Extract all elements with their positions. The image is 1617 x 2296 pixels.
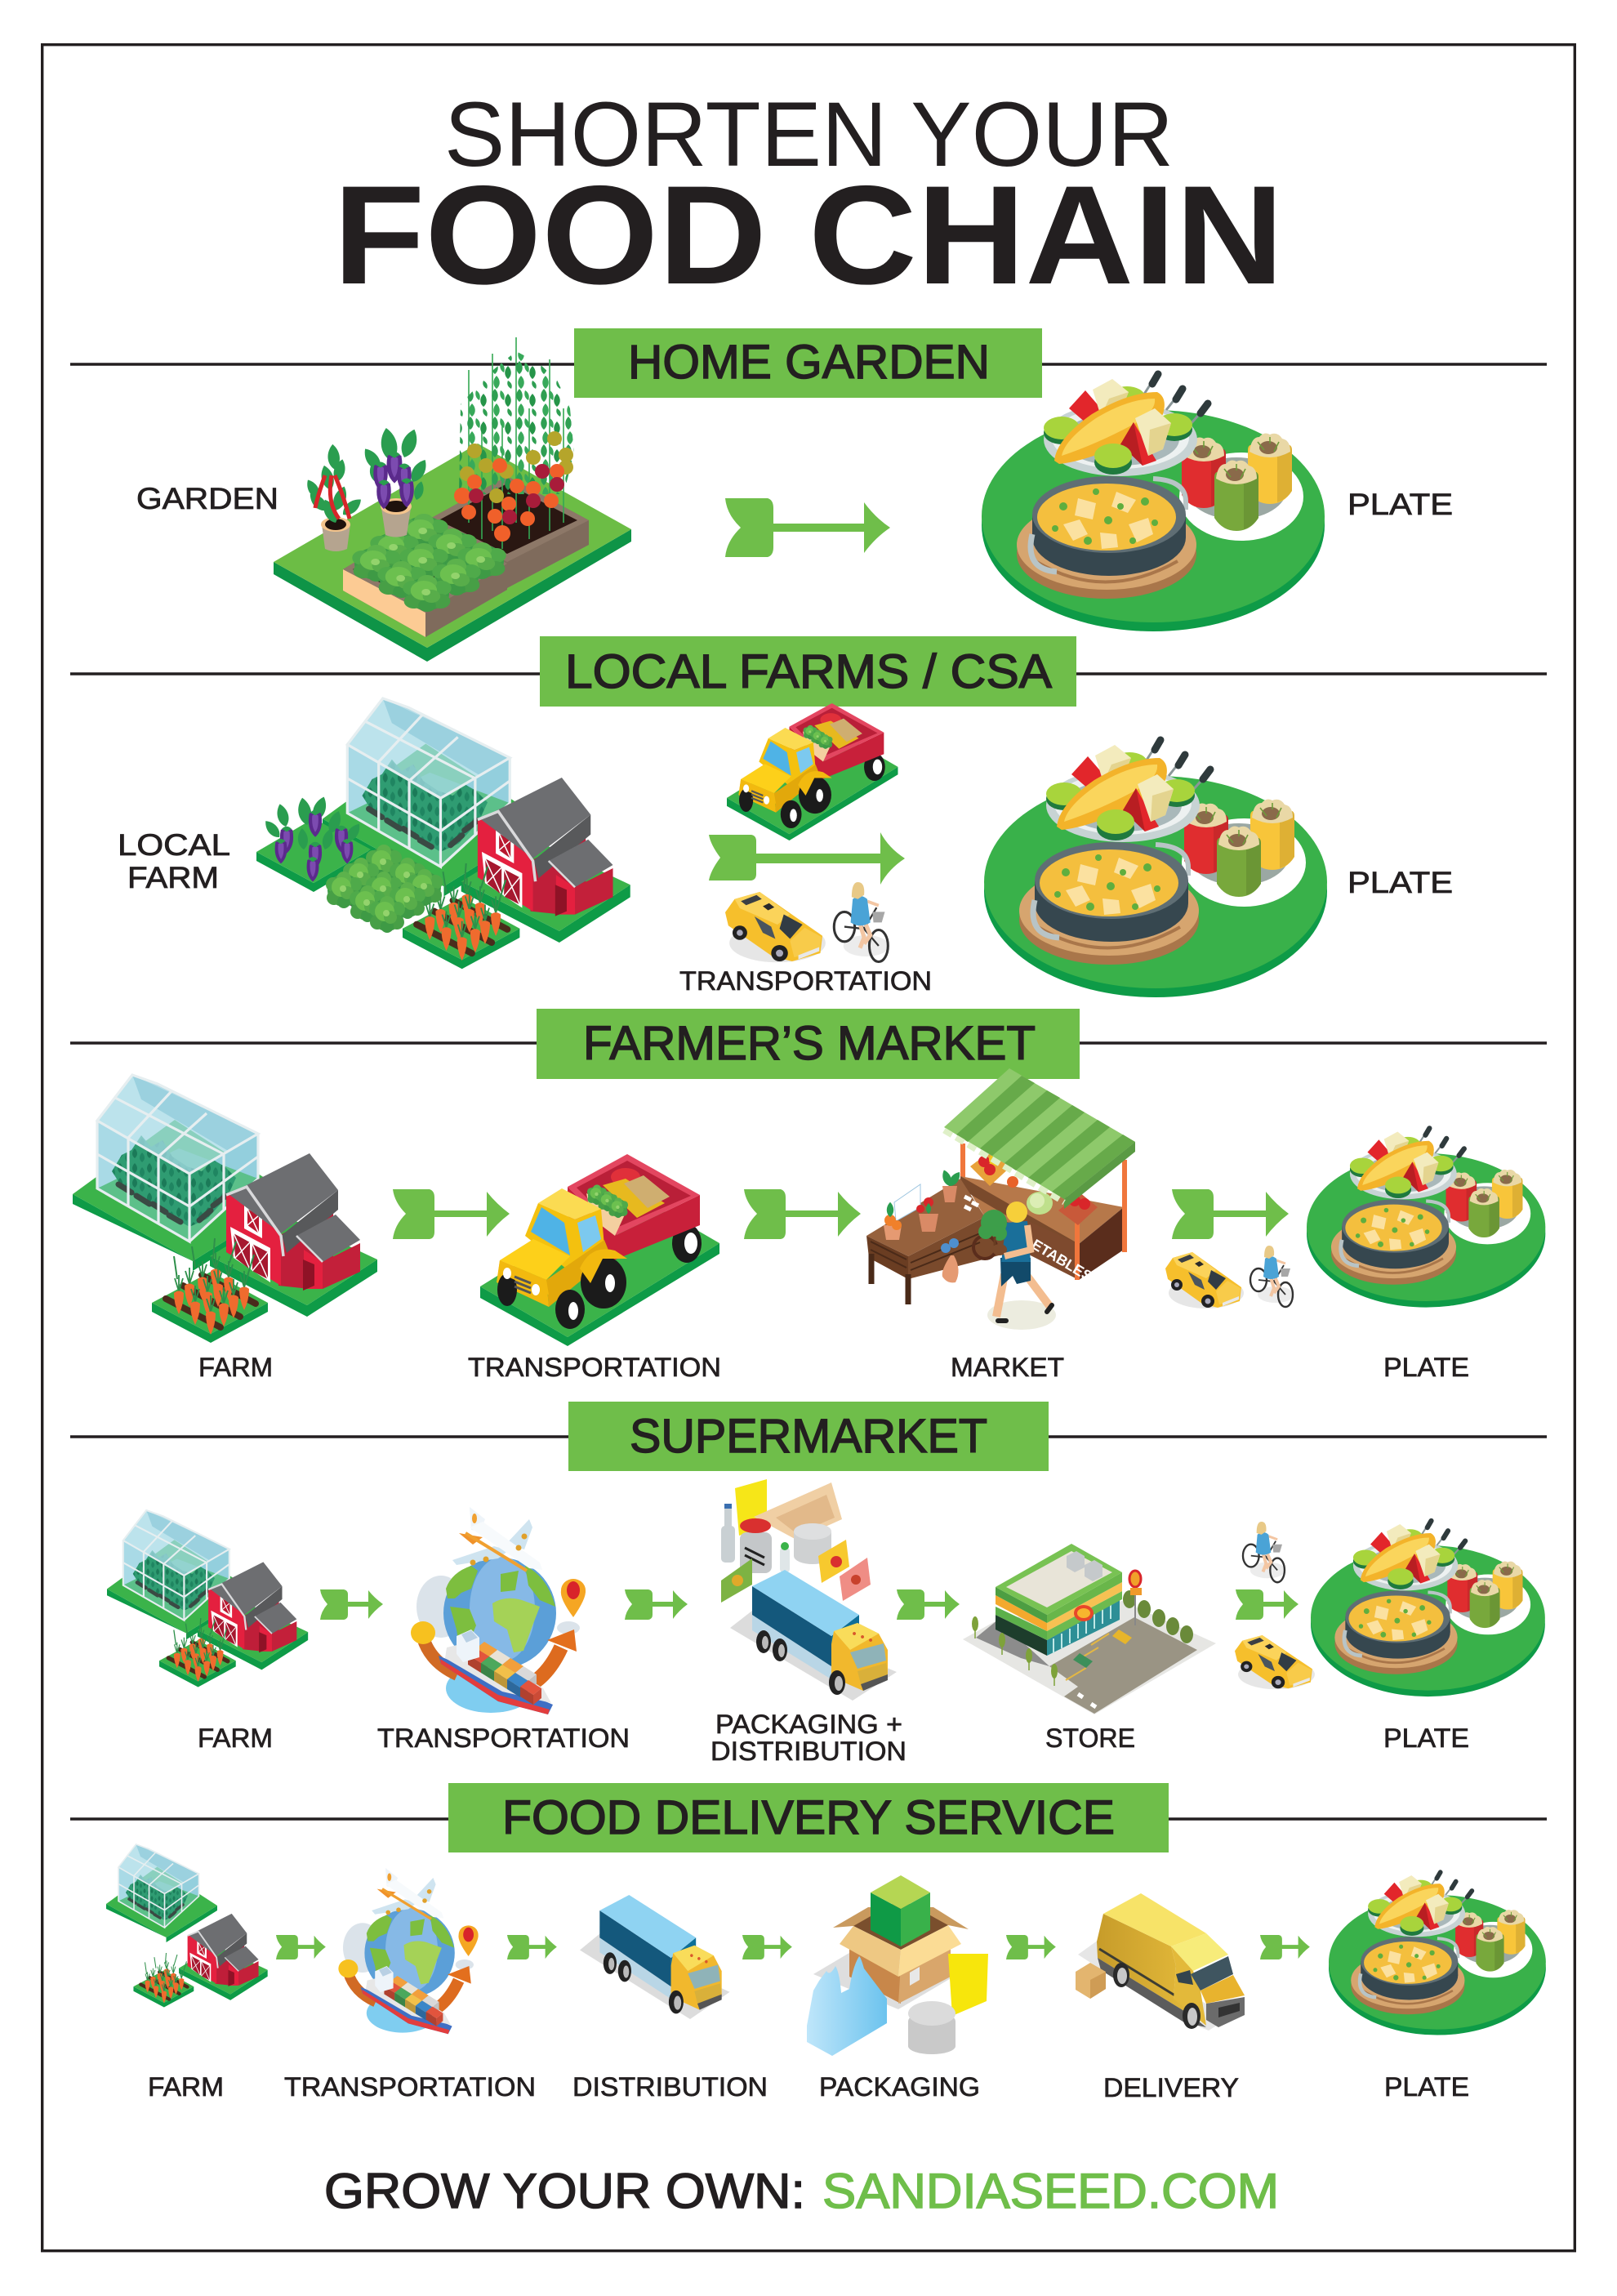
label: store: STORE — [1045, 1723, 1135, 1753]
icon: farm — [73, 1075, 377, 1343]
icon: bicycle — [1243, 1522, 1285, 1582]
label: plate: PLATE — [1384, 2072, 1469, 2102]
panel: farmer's market — [70, 1009, 1547, 1382]
icon: bicycle — [1250, 1246, 1294, 1307]
label: farm: FARM — [198, 1353, 273, 1382]
icon: plate of food — [1329, 1871, 1546, 2035]
icon: bicycle — [834, 882, 889, 962]
label: plate: PLATE — [1348, 488, 1453, 521]
arrow: transportation to packaging — [625, 1589, 688, 1620]
arrow: farm to plate — [709, 832, 905, 885]
panel: local farms / csa — [70, 636, 1547, 997]
icon: tractor — [480, 1154, 719, 1346]
panel: food delivery service — [70, 1783, 1547, 2102]
label: local farm: LOCAL — [118, 828, 230, 862]
heading: food delivery service: FOOD DELIVERY SERVICE — [502, 1791, 1115, 1844]
heading: supermarket: SUPERMARKET — [630, 1410, 987, 1463]
arrow: farm to transportation — [393, 1189, 510, 1239]
icon: plate of food — [984, 738, 1327, 997]
icon: market stall: ETABLES — [1029, 1236, 1095, 1285]
arrow: garden to plate — [725, 498, 890, 557]
icon: supermarket building and parking — [963, 1544, 1216, 1714]
icon: local farm with plots — [256, 698, 630, 969]
icon: globe with plane and ship — [411, 1507, 586, 1714]
icon: raised garden beds — [274, 337, 631, 662]
heading: home garden — [574, 328, 1042, 398]
heading: farmer's market — [537, 1009, 1080, 1079]
arrow: distribution to packaging — [742, 1935, 792, 1959]
label: plate: PLATE — [1383, 1723, 1469, 1753]
label: market: MARKET — [951, 1353, 1064, 1382]
label: plate: PLATE — [1348, 866, 1453, 899]
label: packaging + distribution — [710, 1710, 906, 1766]
arrow: farm to transportation — [276, 1935, 326, 1959]
icon: farm — [106, 1844, 268, 2008]
icon: delivery van — [1076, 1893, 1245, 2031]
label: delivery: DELIVERY — [1103, 2073, 1239, 2102]
label: local farm — [118, 828, 230, 894]
heading: farmer's market: FARMER’S MARKET — [583, 1017, 1036, 1070]
icon: globe with plane and ship — [338, 1868, 479, 2034]
label: transportation: TRANSPORTATION — [468, 1353, 721, 1382]
label: plate: PLATE — [1383, 1353, 1469, 1382]
label: transportation: TRANSPORTATION — [679, 966, 932, 996]
title — [333, 83, 1284, 314]
icon: taxi — [1235, 1635, 1315, 1689]
icon: plate of food — [982, 372, 1325, 631]
icon: farm — [107, 1510, 308, 1687]
label: transportation: TRANSPORTATION — [377, 1723, 630, 1753]
heading: supermarket — [568, 1402, 1049, 1471]
label: transportation: TRANSPORTATION — [284, 2072, 536, 2102]
icon: cardboard box and bags — [807, 1875, 988, 2056]
arrow: market to plate — [1172, 1189, 1289, 1239]
title line one: SHORTEN YOUR — [444, 83, 1174, 185]
label: packaging + distribution: DISTRIBUTION — [710, 1736, 906, 1766]
arrow: store to plate — [1236, 1589, 1298, 1620]
icon: plate of food — [1311, 1520, 1545, 1696]
heading: home garden: HOME GARDEN — [628, 336, 990, 389]
label: distribution: DISTRIBUTION — [572, 2072, 768, 2102]
icon: taxi — [725, 892, 826, 962]
icon: plate of food — [1307, 1127, 1545, 1308]
title line two: FOOD CHAIN — [333, 157, 1284, 314]
icon: delivery truck — [580, 1895, 730, 2019]
label: packaging: PACKAGING — [819, 2072, 980, 2102]
arrow: delivery to plate — [1260, 1935, 1310, 1959]
footer link: SANDIASEED.COM — [822, 2164, 1279, 2218]
panel: home garden — [70, 328, 1547, 662]
arrow: transportation to market — [744, 1189, 861, 1239]
arrow: transportation to distribution — [507, 1935, 557, 1959]
label: garden: GARDEN — [136, 482, 278, 515]
label: farm: FARM — [198, 1723, 273, 1753]
label: farm: FARM — [148, 2072, 224, 2102]
label: packaging + distribution: PACKAGING + — [715, 1710, 902, 1739]
icon: delivery truck — [730, 1570, 897, 1701]
icon: packaged goods — [721, 1479, 871, 1603]
icon: tractor — [727, 703, 898, 840]
icon: market stall — [866, 1068, 1135, 1330]
panel: supermarket — [70, 1402, 1547, 1766]
heading: local farms / csa: LOCAL FARMS / CSA — [565, 645, 1052, 698]
footer text: GROW YOUR OWN: — [324, 2164, 805, 2218]
arrow: farm to transportation — [320, 1589, 383, 1620]
footer call to action — [324, 2164, 1279, 2218]
arrow: packaging to store — [897, 1589, 960, 1620]
heading: local farms / csa — [540, 636, 1076, 707]
heading: food delivery service — [448, 1783, 1169, 1852]
label: local farm: FARM — [127, 861, 219, 894]
arrow: packaging to delivery — [1006, 1935, 1056, 1959]
icon: taxi — [1165, 1252, 1244, 1308]
